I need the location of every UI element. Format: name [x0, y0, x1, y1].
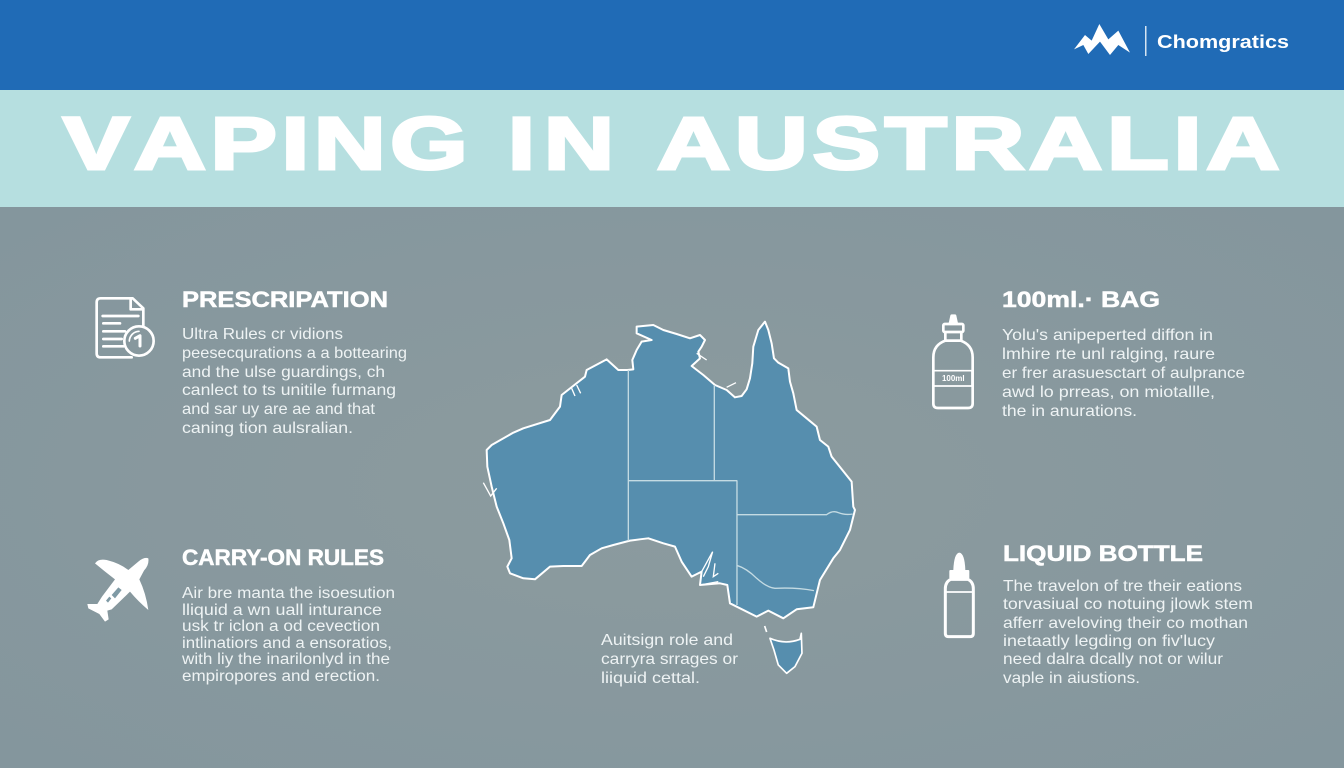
icon: prescription document	[97, 298, 154, 357]
text block: 100ml bag: the in anurations.	[1002, 403, 1137, 420]
text block: liquid bottle	[1003, 578, 1253, 687]
text block: carry-on rules	[181, 585, 395, 685]
text block: map caption: Auitsign role and	[601, 632, 733, 649]
text block: liquid bottle: vaple in aiustions.	[1003, 670, 1140, 687]
text block: 100ml bag: er frer arasuesctart of aulprance	[1002, 365, 1245, 382]
text block: liquid bottle: afferr aveloving their co mothan	[1003, 615, 1248, 632]
icon: dropper bottle	[945, 553, 973, 637]
panel: carry-on rules	[87, 545, 395, 685]
logo divider	[1145, 26, 1146, 56]
text block: map caption: liiquid cettal.	[601, 670, 700, 687]
title: VAPING	[63, 102, 472, 185]
title: IN	[508, 103, 623, 185]
king island	[765, 626, 767, 632]
text block: 100ml bag: Yolu's anipeperted diffon in	[1002, 327, 1213, 344]
text block: carry-on rules: empiropores and erection.	[182, 668, 380, 685]
text block: prescription: caning tion aulsralian.	[182, 420, 353, 437]
panel: title band	[0, 90, 1344, 207]
title: AUSTRALIA	[657, 102, 1284, 185]
text block: prescription: and sar uy are ae and that	[182, 401, 376, 418]
text block: prescription: canlect to ts unitile furmang	[182, 382, 396, 399]
text block: prescription: peesecqurations a a bottearing	[182, 345, 407, 362]
text block: liquid bottle: need dalra dcally not or wilur	[1003, 651, 1224, 668]
text block: 100ml bag: lmhire rte unl ralging, raure	[1002, 346, 1215, 363]
title	[63, 102, 1284, 185]
text block: prescription: Ultra Rules cr vidions	[182, 326, 343, 343]
text block: prescription: and the ulse guardings, ch	[182, 364, 385, 381]
heading: liquid bottle: LIQUID BOTTLE	[1003, 541, 1203, 566]
heading: carry-on rules: CARRY-ON RULES	[182, 545, 384, 570]
panel: liquid bottle	[945, 541, 1253, 687]
text block: 100ml bag	[1002, 327, 1245, 420]
text block: carry-on rules: intlinatiors and a ensoratios,	[182, 635, 392, 652]
text block: carry-on rules: lliquid a wn uall inturance	[182, 602, 382, 619]
panel: prescription	[97, 287, 407, 437]
text block: liquid bottle: inetaatly legding on fiv'lucy	[1003, 633, 1215, 650]
text block: map caption	[601, 632, 739, 687]
coastline details	[483, 353, 736, 585]
tasmania	[770, 633, 802, 673]
panel: page background	[0, 207, 1344, 768]
text block: liquid bottle: The travelon of tre their eations	[1003, 578, 1242, 595]
mainland outline	[487, 322, 855, 618]
heading: 100ml bag: 100ml.· BAG	[1002, 287, 1160, 312]
text block: carry-on rules: with liy the inarilonlyd in the	[181, 651, 390, 668]
text block: carry-on rules: usk tr iclon a od cevection	[182, 618, 380, 635]
icon: mountain logo mark	[1074, 24, 1130, 55]
panel: top blue header bar	[0, 0, 1344, 90]
logo	[1074, 24, 1289, 56]
text block: prescription	[182, 326, 407, 437]
icon: 100ml bottle	[933, 316, 973, 408]
map: australia	[483, 322, 855, 673]
text block: map caption: carryra srrages or	[601, 651, 739, 668]
heading: prescription: PRESCRIPATION	[182, 287, 388, 312]
icon: airplane	[87, 558, 148, 622]
state borders	[628, 370, 853, 605]
text block: carry-on rules: Air bre manta the isoesution	[182, 585, 395, 602]
panel: 100ml bag	[933, 287, 1245, 420]
icon: 100ml bottle: 100ml	[942, 374, 965, 383]
text block: liquid bottle: torvasiual co notuing jlowk stem	[1003, 596, 1253, 613]
logo wordmark: Chomgratics	[1157, 31, 1289, 52]
text block: 100ml bag: awd lo prreas, on miotallle,	[1002, 384, 1215, 401]
